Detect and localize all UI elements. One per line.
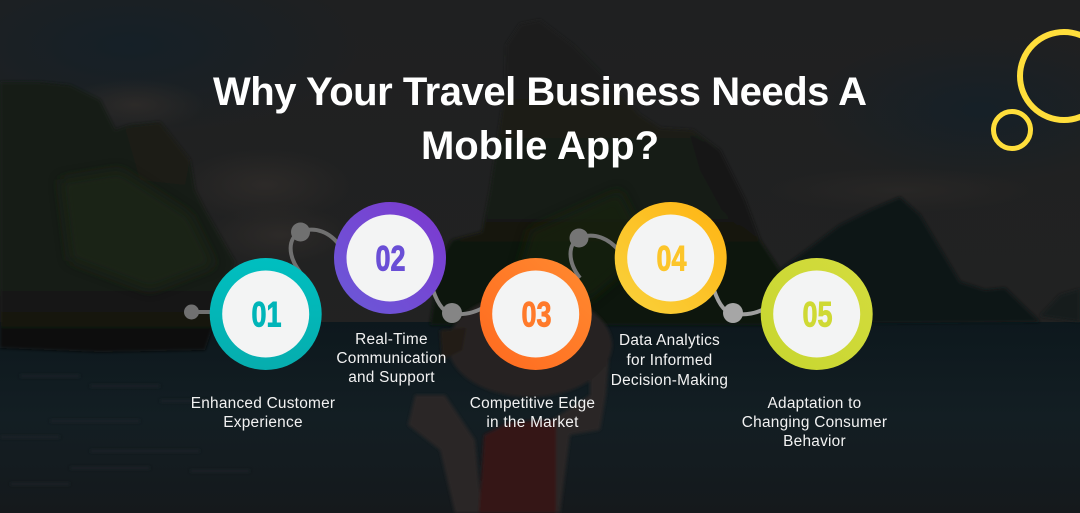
step 02 [334,202,447,386]
connector node 3 [442,303,462,323]
connector lines and nodes [184,222,768,323]
step 05: Behavior [783,433,846,450]
step 02: and Support [348,369,435,386]
title: Mobile App? [421,124,659,168]
step 04: for Informed [627,352,712,369]
step 05: 05 [803,295,832,334]
step 03: in the Market [486,414,579,431]
step 04: 04 [657,239,687,278]
connector node 5 [723,303,743,323]
step 01: 01 [252,295,281,334]
step 01: Enhanced Customer [191,395,335,412]
connector node 4 [570,228,588,248]
step 04: Decision-Making [611,372,728,389]
step 01 [191,258,335,431]
connector node 2 [291,222,310,242]
step 03: 03 [522,295,551,334]
step 05: Adaptation to [768,395,861,412]
step 03: Competitive Edge [470,395,595,412]
step 04: Data Analytics [619,332,720,349]
step 02: Real-Time [355,331,428,348]
step 01: Experience [223,414,303,431]
step 03 [470,258,595,431]
step 04 [611,202,728,389]
decorative circles: yellow rings [994,32,1080,148]
title: Why Your Travel Business Needs A [213,70,867,114]
title [213,70,867,168]
connector node 1 [184,304,199,320]
step 05: Changing Consumer [742,414,887,431]
step 05 [742,258,887,450]
step 02: Communication [336,350,447,367]
step 02: 02 [376,239,405,278]
